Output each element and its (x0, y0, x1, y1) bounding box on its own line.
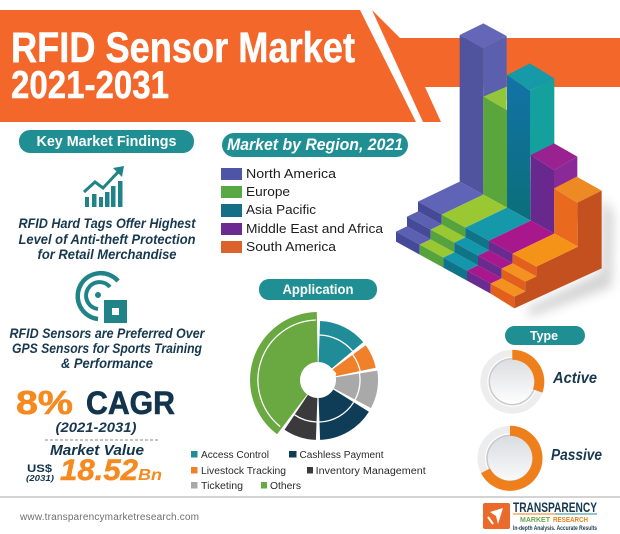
logo: transparency market research (483, 499, 598, 532)
finding text: gps sensors: GPS Sensors for Sports Training (12, 340, 202, 356)
icon: growth chart (84, 166, 124, 207)
blue tower (460, 23, 507, 195)
gauge: passive (478, 426, 542, 491)
finding text: hard tags (18, 215, 197, 262)
finding text: gps sensors (10, 325, 206, 371)
banner (0, 10, 620, 122)
green tower (483, 87, 507, 208)
region legend: Europe (246, 184, 290, 199)
stairs: asia pacific (443, 208, 531, 281)
segment: access control (319, 321, 363, 368)
application legend: Livestock Tracking (201, 466, 286, 477)
pill: key market findings (19, 130, 194, 153)
market value stat (26, 440, 162, 487)
region legend: Middle East and Africa (246, 221, 384, 236)
application legend: Access Control (201, 450, 269, 461)
title: 2021-2031 (11, 64, 169, 107)
ring lines (258, 320, 360, 427)
market value stat: Market Value (50, 442, 144, 459)
pill: type (505, 326, 585, 345)
pill: application: Application (282, 281, 354, 297)
segment: inventory management (284, 395, 317, 440)
finding text: gps sensors: & Performance (61, 355, 153, 371)
application legend: Inventory Management (316, 466, 426, 477)
gauge: active (480, 350, 544, 414)
pill: key market findings: Key Market Findings (36, 133, 176, 150)
finding text: hard tags: RFID Hard Tags Offer Highest (18, 215, 197, 231)
market value stat: 18.52 (60, 454, 138, 487)
cagr stat: (2021-2031) (56, 419, 137, 435)
region legend: Asia Pacific (246, 202, 317, 217)
icon: rfid signal (78, 273, 127, 323)
segment: others (250, 312, 318, 434)
cagr stat (16, 384, 175, 435)
segment: ticketing (334, 371, 378, 408)
finding text: hard tags: Level of Anti-theft Protection (18, 231, 196, 247)
region legend: South America (246, 239, 337, 254)
segment: cashless payment (319, 390, 369, 440)
segment: livestock tracking (333, 345, 376, 376)
region legend (221, 166, 384, 254)
application legend (191, 450, 426, 492)
cagr stat: 8% (16, 384, 73, 421)
logo mark (483, 503, 510, 529)
teal tower (507, 63, 554, 221)
market value stat: (2031) (26, 473, 54, 483)
stairs: europe (420, 195, 507, 268)
pill: market by region: Market by Region, 2021 (227, 136, 403, 154)
logo: transparency market research: RESEARCH (553, 517, 588, 524)
orange tower (514, 177, 602, 308)
pill: type: Type (530, 329, 558, 343)
application legend: Cashless Payment (300, 450, 384, 461)
label: passive: Passive (551, 447, 602, 464)
pill: application (259, 279, 377, 300)
finding text: gps sensors: RFID Sensors are Preferred Over (10, 325, 206, 341)
purple tower (531, 143, 577, 234)
stairs: north america (396, 182, 483, 255)
region legend: North America (246, 166, 337, 181)
stairs: middle east and africa (467, 221, 554, 294)
donut chart: application (250, 312, 378, 440)
application legend: Others (270, 481, 301, 492)
logo: transparency market research: In-depth Analysis. Accurate Results (513, 526, 598, 532)
title: RFID Sensor Market (11, 24, 355, 72)
label: active: Active (552, 370, 597, 387)
3D stepped bar chart (396, 23, 613, 317)
finding text: hard tags: for Retail Merchandise (38, 246, 177, 262)
website url: www.transparencymarketresearch.com (19, 512, 199, 523)
market value stat: Bn (138, 467, 162, 484)
cagr stat: CAGR (86, 385, 175, 421)
stairs: south america (491, 234, 578, 308)
title (11, 24, 355, 107)
market value stat: US$ (27, 463, 52, 475)
logo: transparency market research: MARKET (520, 517, 551, 524)
application legend: Ticketing (201, 481, 243, 492)
